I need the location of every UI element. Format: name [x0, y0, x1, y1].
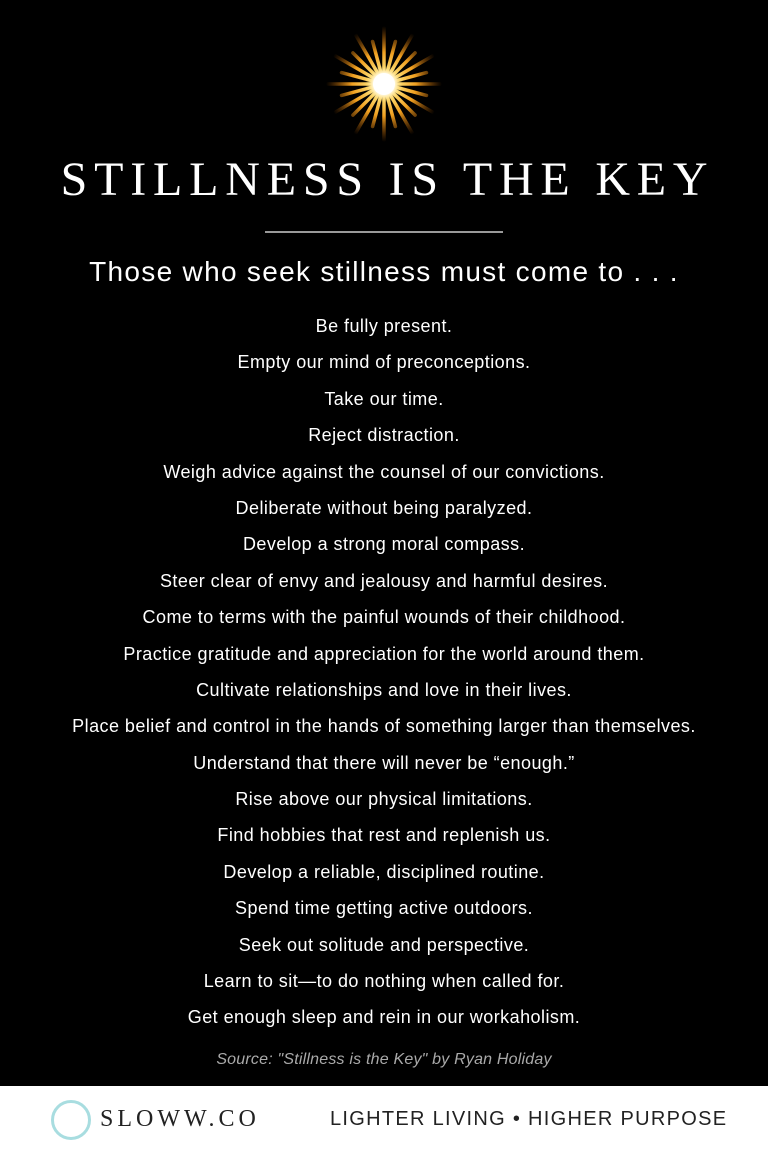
text block: list of practices: Practice gratitude and appreciation for the world around them. — [123, 644, 645, 664]
text block: list of practices: Cultivate relationships and love in their lives. — [196, 680, 572, 700]
logo text: SLOWW.CO — [100, 1106, 260, 1132]
text block: list of practices: Place belief and control in the hands of something larger than themselves. — [72, 716, 696, 736]
text block: list of practices: Steer clear of envy and jealousy and harmful desires. — [160, 571, 608, 591]
text block: list of practices: Learn to sit—to do nothing when called for. — [204, 971, 564, 991]
title: STILLNESS IS THE KEY — [61, 153, 714, 206]
text block: list of practices: Find hobbies that rest and replenish us. — [217, 825, 551, 845]
text block: list of practices: Come to terms with the painful wounds of their childhood. — [143, 607, 625, 627]
tagline: LIGHTER LIVING • HIGHER PURPOSE — [330, 1108, 727, 1130]
text block: list of practices: Empty our mind of preconceptions. — [238, 352, 530, 372]
icon: logo circle — [51, 1100, 91, 1140]
text block: list of practices: Be fully present. — [316, 316, 452, 336]
footer — [0, 1086, 768, 1152]
text block: list of practices: Spend time getting active outdoors. — [235, 898, 533, 918]
source note: Source: "Stillness is the Key" by Ryan Holiday — [216, 1051, 552, 1068]
text block: list of practices: Develop a reliable, disciplined routine. — [223, 862, 545, 882]
text block: list of practices: Develop a strong moral compass. — [243, 534, 525, 554]
text block: list of practices: Reject distraction. — [308, 425, 460, 445]
text block: list of practices — [72, 316, 696, 1027]
text block: list of practices: Get enough sleep and rein in our workaholism. — [188, 1007, 580, 1027]
subtitle: Those who seek stillness must come to . . . — [89, 256, 679, 287]
icon: sun — [327, 27, 441, 141]
text block: list of practices: Rise above our physical limitations. — [235, 789, 533, 809]
text block: list of practices: Deliberate without being paralyzed. — [236, 498, 532, 518]
text block: list of practices: Understand that there will never be “enough.” — [193, 753, 575, 773]
text block: list of practices: Seek out solitude and perspective. — [239, 935, 529, 955]
text block: list of practices: Take our time. — [324, 389, 444, 409]
text block: list of practices: Weigh advice against the counsel of our convictions. — [163, 462, 605, 482]
